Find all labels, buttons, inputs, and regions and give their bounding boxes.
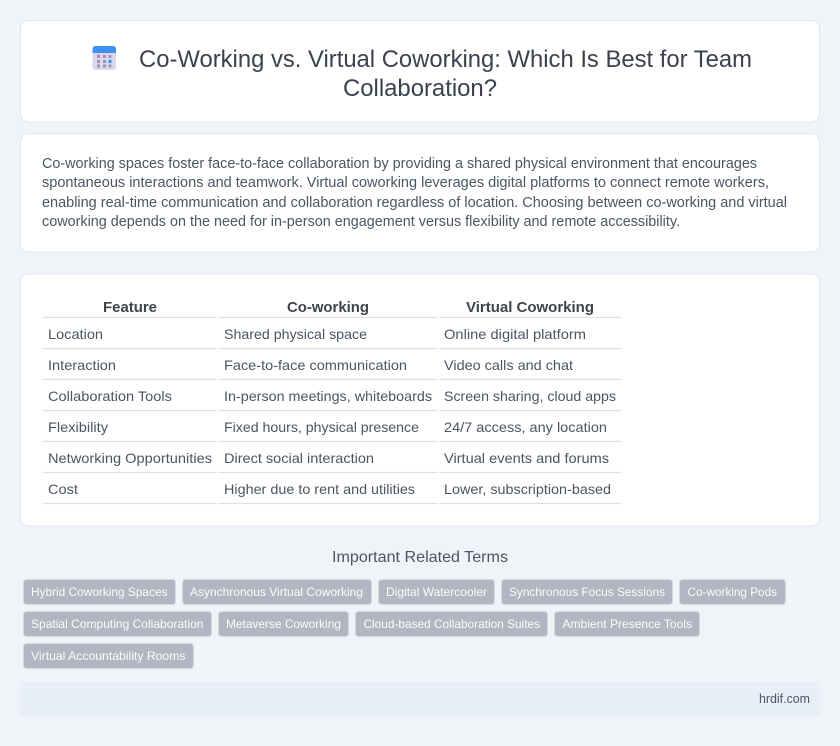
table row: collaboration tools: Screen sharing, cloud apps <box>444 388 616 404</box>
tag <box>24 644 194 668</box>
text block: introduction paragraph: Co-working spaces foster face-to-face collaboration by providing a shared physical environment that encourages <box>42 156 757 172</box>
title: Collaboration? <box>343 75 497 102</box>
panel: comparison table <box>20 274 820 526</box>
table row: networking opportunities <box>48 450 609 466</box>
table row: collaboration tools: Collaboration Tools <box>48 388 172 404</box>
footer source text: hrdif.com <box>759 691 810 706</box>
table row: flexibility: Fixed hours, physical presence <box>224 419 419 435</box>
icon: calendar <box>92 46 116 70</box>
tag <box>680 580 786 604</box>
tag: Synchronous Focus Sessions <box>509 585 665 599</box>
table row: flexibility <box>48 419 607 435</box>
tag <box>502 580 672 604</box>
title: Co-Working vs. Virtual Coworking: Which Is Best for Team <box>139 46 752 73</box>
table header: Feature <box>103 299 157 316</box>
table row: interaction: Interaction <box>48 357 116 373</box>
text block: introduction paragraph: coworking depends on the need for in-person engagement versus flexibility and remote accessibility. <box>42 214 680 230</box>
table row: cost: Cost <box>48 481 78 497</box>
table row: location: Shared physical space <box>224 326 367 342</box>
tag <box>554 612 700 636</box>
panel: related term tags <box>24 580 786 668</box>
tag: Cloud-based Collaboration Suites <box>364 617 540 631</box>
table row: interaction: Face-to-face communication <box>224 357 407 373</box>
tag: Metaverse Coworking <box>226 617 341 631</box>
tag: Ambient Presence Tools <box>562 617 692 631</box>
tag <box>182 580 372 604</box>
tag: Asynchronous Virtual Coworking <box>190 585 363 599</box>
footer <box>20 682 820 716</box>
table row: location: Location <box>48 326 103 342</box>
tag: Digital Watercooler <box>386 585 487 599</box>
tag: Virtual Accountability Rooms <box>31 649 186 663</box>
table row: collaboration tools <box>48 388 616 404</box>
table row: cost: Lower, subscription-based <box>444 481 611 497</box>
table row: cost: Higher due to rent and utilities <box>224 481 415 497</box>
text block: introduction paragraph: spontaneous interactions and teamwork. Virtual coworking leverages digital platforms to connect remote workers, <box>42 175 769 191</box>
tag: Hybrid Coworking Spaces <box>31 585 168 599</box>
table row: interaction <box>48 357 573 373</box>
table header: Virtual Coworking <box>466 299 594 316</box>
table header: Co-working <box>287 299 369 316</box>
tag: Spatial Computing Collaboration <box>31 617 204 631</box>
table row: location <box>48 326 586 342</box>
table header <box>103 299 594 316</box>
tag: Co-working Pods <box>688 585 777 599</box>
table row: interaction: Video calls and chat <box>444 357 573 373</box>
text block: introduction paragraph <box>42 156 787 230</box>
table row: cost <box>48 481 611 497</box>
tag <box>378 580 494 604</box>
table row: flexibility: 24/7 access, any location <box>444 419 607 435</box>
table row: networking opportunities: Networking Opportunities <box>48 450 212 466</box>
table row: networking opportunities: Direct social interaction <box>224 450 374 466</box>
tag <box>218 612 348 636</box>
tag <box>24 612 212 636</box>
table row: location: Online digital platform <box>444 326 586 342</box>
tag <box>356 612 548 636</box>
tag <box>24 580 176 604</box>
table row: networking opportunities: Virtual events and forums <box>444 450 609 466</box>
title <box>139 46 752 102</box>
table row: flexibility: Flexibility <box>48 419 108 435</box>
heading: important related terms: Important Related Terms <box>332 549 508 566</box>
table row: collaboration tools: In-person meetings, whiteboards <box>224 388 432 404</box>
text block: introduction paragraph: enabling real-time communication and collaboration regardless of location. Choosing between co-working and virtual <box>42 195 787 211</box>
panel: introduction <box>20 134 820 252</box>
panel: title header <box>20 20 820 122</box>
